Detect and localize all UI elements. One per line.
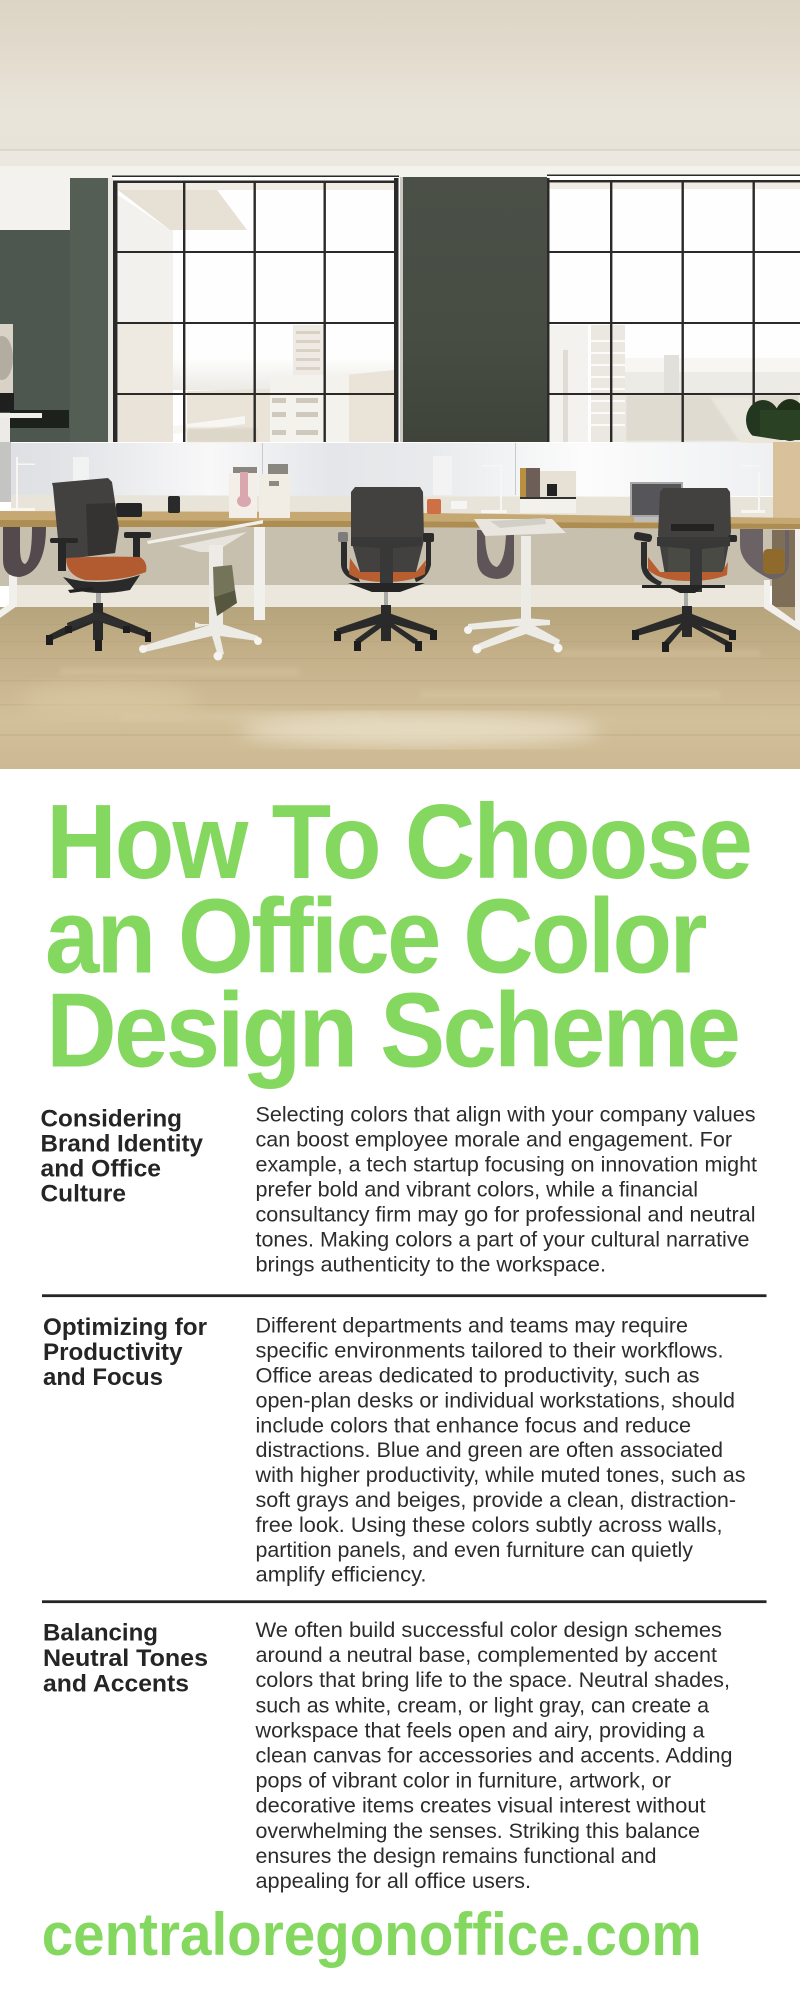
section 2: productivity and focus [43, 1314, 746, 1587]
orange mug [427, 499, 441, 514]
lower wall and baseboard [0, 526, 800, 620]
section 2 heading: and Focus [43, 1364, 163, 1391]
rolling table, flat [464, 518, 566, 654]
section 1 body: tones. Making colors a part of your cultural narrative [256, 1229, 750, 1252]
section 2 body: partition panels, and even furniture can quietly [256, 1539, 694, 1562]
section 3: neutral tones and accents [43, 1619, 732, 1893]
small white desk at far left [0, 413, 42, 444]
section 2 body: Office areas dedicated to productivity, such as [256, 1364, 700, 1388]
footer website address: centraloregonoffice.com [42, 1901, 702, 1968]
chair 3 [632, 488, 737, 652]
section 1 body: can boost employee morale and engagement. For [256, 1129, 732, 1152]
section 2 body: distractions. Blue and green are often associated [256, 1439, 723, 1462]
section 3 heading [43, 1620, 208, 1698]
privacy panels [0, 442, 773, 520]
section 1 heading: Brand Identity [40, 1131, 204, 1158]
section 1 heading: Considering [40, 1106, 182, 1133]
chair 1 [46, 478, 151, 651]
leather bag in pod [763, 549, 785, 574]
section 2 heading: Optimizing for [43, 1314, 207, 1341]
section 3 body: We often build successful color design schemes [256, 1619, 722, 1642]
title: Design Scheme [46, 971, 741, 1090]
floor [0, 607, 800, 769]
section 2 body: Different departments and teams may require [256, 1315, 688, 1338]
olive hanging bag [213, 565, 237, 616]
back wall and columns [0, 176, 547, 444]
section 2 body: with higher productivity, while muted tones, such as [254, 1464, 746, 1487]
section 2 body: free look. Using these colors subtly across walls, [256, 1514, 722, 1537]
section 2 body: specific environments tailored to their workflows. [256, 1340, 724, 1363]
section 1 body: Selecting colors that align with your company values [256, 1104, 756, 1127]
section 3 body: such as white, cream, or light gray, can create a [256, 1694, 709, 1717]
section 2 body [254, 1315, 746, 1587]
section 1: brand identity [40, 1104, 757, 1277]
books, plant and organizer [520, 468, 576, 513]
section 3 body: colors that bring life to the space. Neutral shades, [256, 1669, 730, 1692]
black mug [168, 496, 180, 513]
section 3 body [254, 1619, 732, 1893]
section 3 body: pops of vibrant color in furniture, artwork, or [256, 1770, 671, 1793]
section 3 body: around a neutral base, complemented by accent [256, 1644, 717, 1667]
section 2 body: open-plan desks or individual workstations, should [256, 1389, 735, 1412]
section 1 heading: and Office [40, 1156, 161, 1183]
section 3 body: overwhelming the senses. Striking this balance [256, 1820, 700, 1843]
section 2 heading: Productivity [43, 1339, 183, 1366]
section 2 body: include colors that enhance focus and reduce [256, 1414, 691, 1437]
wall painting [0, 324, 14, 412]
right window [547, 174, 800, 442]
magazine files and pink headphones [229, 464, 290, 518]
chair 2 [334, 487, 437, 651]
black tablet [116, 503, 142, 517]
section 3 body: ensures the design remains functional and [256, 1845, 656, 1868]
section 1 heading [40, 1106, 204, 1208]
section 1 body: example, a tech startup focusing on innovation might [256, 1154, 757, 1177]
section 2 heading [43, 1314, 207, 1391]
title [45, 782, 753, 1090]
section 2 body: amplify efficiency. [256, 1564, 426, 1587]
planter and hedge [742, 399, 800, 522]
section 1 body: prefer bold and vibrant colors, while a financial [256, 1179, 698, 1202]
laptop [630, 482, 683, 522]
desk surface [0, 511, 800, 529]
title: How To Choose [46, 782, 753, 901]
section 3 heading: Balancing [43, 1620, 158, 1646]
rolling table, tilted [139, 520, 263, 660]
left window [112, 176, 399, 442]
section 3 body: clean canvas for accessories and accents. Adding [256, 1744, 732, 1768]
section 3 heading: and Accents [43, 1670, 189, 1698]
desk legs [0, 527, 800, 631]
section 1 body: brings authenticity to the workspace. [256, 1254, 606, 1277]
desk lamps [11, 457, 765, 513]
section 3 heading: Neutral Tones [43, 1645, 208, 1672]
section 3 body: appealing for all office users. [256, 1870, 531, 1893]
desk accessories [11, 457, 765, 522]
hanging fabric storage pods [3, 527, 789, 579]
section 1 heading: Culture [40, 1181, 126, 1208]
title: an Office Color [45, 877, 707, 996]
ceiling [0, 0, 800, 178]
section 2 body: soft grays and beiges, provide a clean, distraction- [256, 1489, 736, 1512]
section 3 body: workspace that feels open and airy, providing a [254, 1719, 705, 1742]
section 1 body: consultancy firm may go for professional and neutral [256, 1204, 756, 1227]
section 3 body: decorative items creates visual interest without [256, 1795, 706, 1818]
section 1 body [256, 1104, 757, 1277]
power outlet [451, 501, 467, 509]
wall-mounted planting [10, 410, 69, 428]
hero photo: open-plan office [0, 0, 800, 769]
